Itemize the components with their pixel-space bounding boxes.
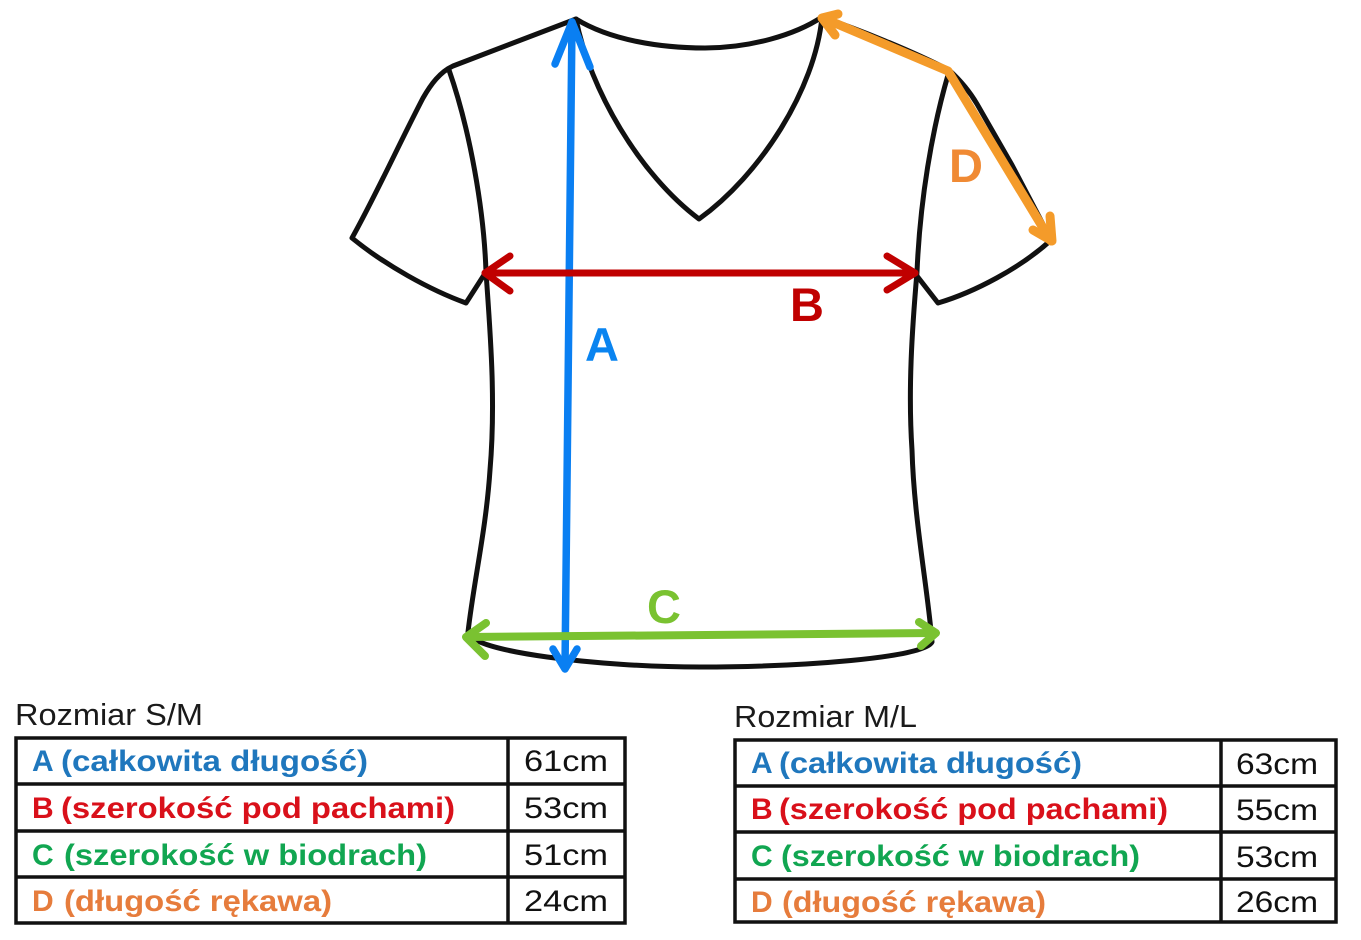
row B <box>751 793 1318 827</box>
row B <box>32 792 608 825</box>
row A <box>751 747 1318 781</box>
row A: 63cm <box>1236 748 1318 781</box>
arrow B: width under arms <box>485 256 915 291</box>
row A: 61cm <box>524 745 608 778</box>
row C <box>751 840 1318 874</box>
row A: (całkowita długość) <box>61 745 368 778</box>
label D: D <box>949 139 983 192</box>
row A <box>32 745 608 778</box>
label C: C <box>647 580 681 633</box>
row D: (długość rękawa) <box>782 886 1046 919</box>
label B: B <box>790 278 824 331</box>
row C: 51cm <box>524 839 608 872</box>
row A: (całkowita długość) <box>779 747 1082 780</box>
row B: (szerokość pod pachami) <box>779 793 1168 826</box>
row D <box>751 886 1318 919</box>
row D: 24cm <box>524 885 608 918</box>
row B: 53cm <box>524 792 608 825</box>
row B: (szerokość pod pachami) <box>61 792 455 825</box>
row C: (szerokość w biodrach) <box>64 839 427 872</box>
row D: D <box>751 886 773 919</box>
table: size S/M <box>16 738 625 923</box>
t-shirt outline <box>352 17 1050 667</box>
row A: A <box>32 745 54 778</box>
arrow C: hip width <box>466 622 936 656</box>
heading: Rozmiar M/L: Rozmiar M/L <box>734 699 917 734</box>
row D <box>32 885 608 918</box>
arrow A: total length <box>553 22 590 669</box>
row D: (długość rękawa) <box>64 885 332 918</box>
row D: D <box>32 885 54 918</box>
row C <box>32 839 608 872</box>
heading: Rozmiar S/M: Rozmiar S/M <box>15 697 203 732</box>
row B: B <box>32 792 54 825</box>
row C: (szerokość w biodrach) <box>781 840 1140 873</box>
row A: A <box>751 747 773 780</box>
table: size M/L <box>735 740 1336 922</box>
label A: A <box>585 318 619 371</box>
row C: 53cm <box>1236 841 1318 874</box>
row B: 55cm <box>1236 794 1318 827</box>
row D: 26cm <box>1236 886 1318 919</box>
row C: C <box>32 839 54 872</box>
row C: C <box>751 840 773 873</box>
arrow D: sleeve length <box>822 14 1052 241</box>
row B: B <box>751 793 773 826</box>
